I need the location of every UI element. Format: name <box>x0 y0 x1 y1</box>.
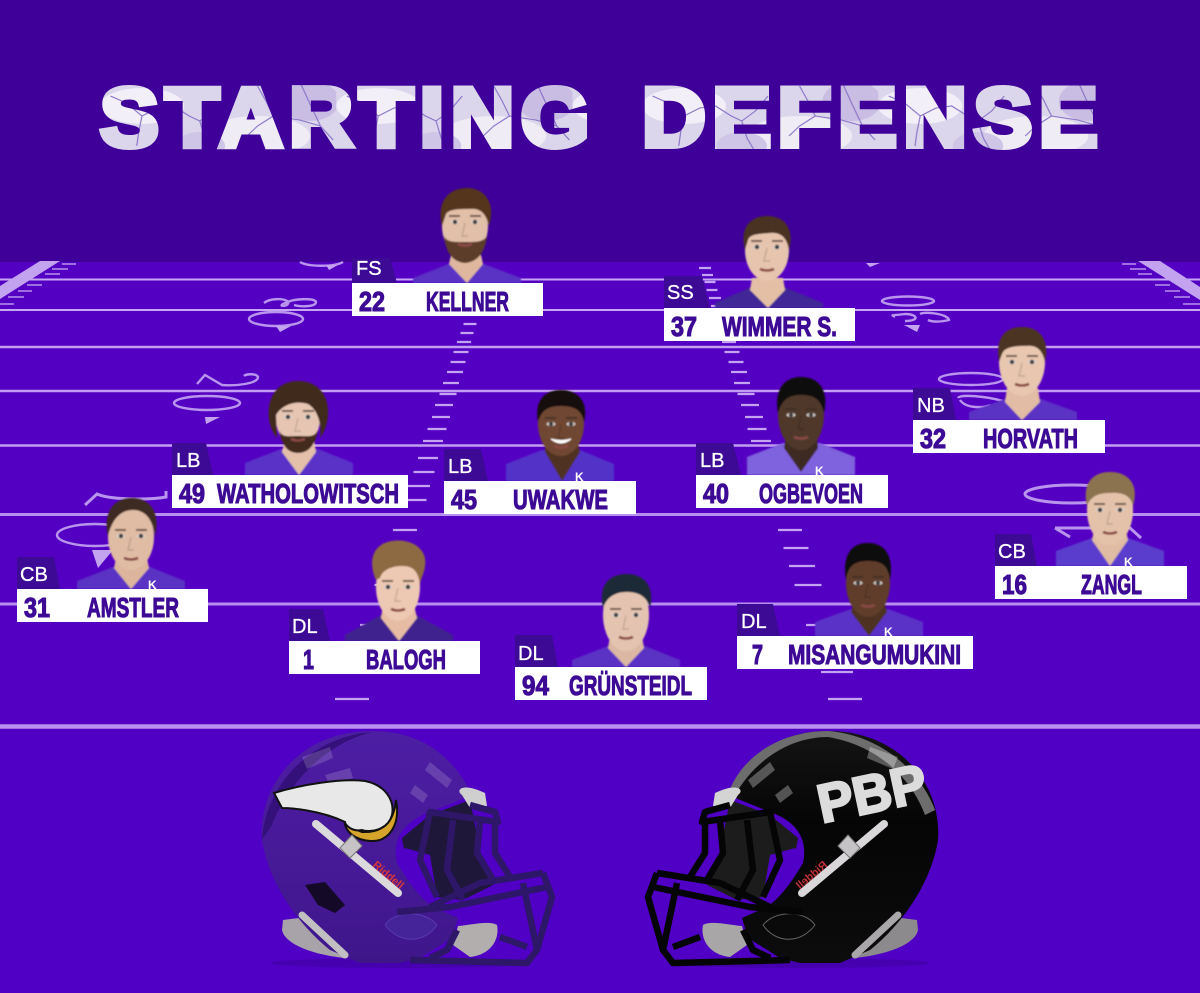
background: night sky band <box>0 0 1200 262</box>
helmet: PBP (black) <box>648 731 938 968</box>
player: LB Watholowitsch: WATHOLOWITSCH <box>217 478 399 509</box>
player: SS Wimmer S.: SS <box>667 282 694 304</box>
player: CB Amstler: K <box>148 578 157 592</box>
player: LB Ogbevoen <box>696 377 888 509</box>
player: DL Balogh: 1 <box>303 644 314 675</box>
player: LB Watholowitsch <box>172 381 408 509</box>
player: DL Grünsteidl: DL <box>518 643 544 665</box>
player: NB Horvath: NB <box>917 395 945 417</box>
player: LB Watholowitsch: LB <box>176 450 200 472</box>
player: LB Uwakwe: LB <box>448 456 472 478</box>
player: FS Kellner <box>352 188 543 317</box>
player: DL Balogh: BALOGH <box>366 644 446 675</box>
player: NB Horvath: HORVATH <box>983 423 1078 454</box>
player: LB Ogbevoen: OGBEVOEN <box>759 478 863 509</box>
player: SS Wimmer S.: 37 <box>671 311 697 342</box>
player: CB Amstler: 31 <box>24 592 50 623</box>
player: DL Grünsteidl <box>515 574 707 701</box>
player: LB Uwakwe <box>444 390 636 515</box>
player: CB Zangl: K <box>1124 555 1133 569</box>
player: DL Misangumukini: 7 <box>752 639 763 670</box>
player: CB Zangl: CB <box>998 541 1026 563</box>
player: SS Wimmer S.: WIMMER S. <box>722 311 837 342</box>
player: FS Kellner: 22 <box>359 286 385 317</box>
player: CB Amstler <box>17 498 208 623</box>
player: FS Kellner: FS <box>356 258 382 280</box>
title: DEFENSE <box>642 71 1098 165</box>
player: CB Zangl: 16 <box>1002 569 1027 600</box>
player: LB Uwakwe: K <box>575 470 584 484</box>
helmet: PBP (black): Riddell <box>794 859 830 892</box>
painted yard numbers <box>57 262 1141 546</box>
player: DL Misangumukini: DL <box>741 611 767 633</box>
player: CB Amstler: CB <box>20 564 48 586</box>
helmet: PBP (black): PBP <box>812 753 932 835</box>
player: DL Balogh: DL <box>292 616 318 638</box>
player: LB Ogbevoen: LB <box>700 450 724 472</box>
left sideline <box>0 261 60 299</box>
player: LB Ogbevoen: K <box>815 464 824 478</box>
player: DL Grünsteidl: GRÜNSTEIDL <box>569 670 692 701</box>
player: DL Misangumukini <box>737 543 973 670</box>
player: CB Amstler: AMSTLER <box>87 592 179 623</box>
player: LB Uwakwe: UWAKWE <box>513 484 608 515</box>
player: DL Misangumukini: MISANGUMUKINI <box>788 639 961 670</box>
player: DL Misangumukini: K <box>884 625 893 639</box>
player: LB Uwakwe: 45 <box>451 484 477 515</box>
helmet: Vikings (purple): Riddell <box>370 859 406 892</box>
center hash marks <box>335 268 862 699</box>
right sideline <box>1138 261 1200 300</box>
title <box>100 71 1098 165</box>
player: NB Horvath <box>913 327 1105 454</box>
player: SS Wimmer S. <box>664 216 855 342</box>
player: FS Kellner: KELLNER <box>426 286 509 317</box>
player: DL Balogh <box>289 540 480 675</box>
helmet: Vikings (purple) <box>262 731 552 968</box>
player: LB Watholowitsch: 49 <box>179 478 205 509</box>
player: LB Ogbevoen: 40 <box>703 478 729 509</box>
player: CB Zangl: ZANGL <box>1081 569 1142 600</box>
player: NB Horvath: 32 <box>920 423 946 454</box>
player: CB Zangl <box>995 472 1187 600</box>
football field <box>0 261 1200 993</box>
title: STARTING <box>100 71 589 165</box>
player: DL Grünsteidl: 94 <box>522 670 549 701</box>
vikings horn logo <box>274 780 397 841</box>
